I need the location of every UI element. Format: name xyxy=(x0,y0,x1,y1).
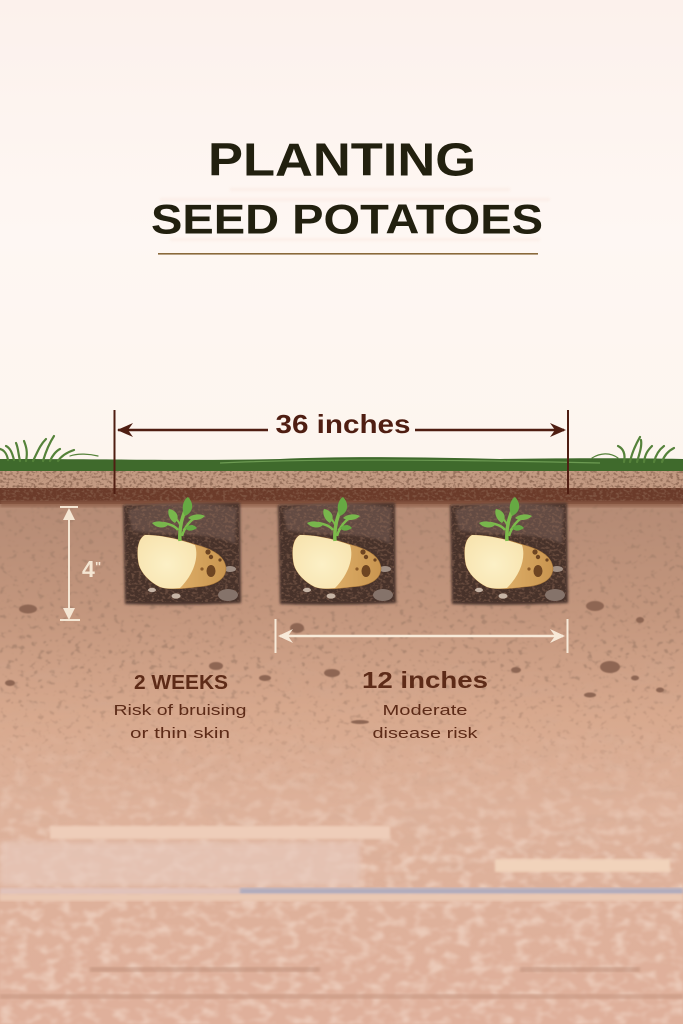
title underline xyxy=(158,253,538,255)
soil background xyxy=(0,495,683,1024)
label: 12 inches: disease risk xyxy=(372,725,478,742)
dimension: 4 inch depth: " xyxy=(95,559,101,574)
faint streaks behind title xyxy=(160,188,550,241)
label: 12 inches xyxy=(362,667,488,742)
dimension: 4 inch depth: 4 xyxy=(82,556,95,582)
title: SEED POTATOES xyxy=(151,196,543,242)
label: 2 weeks xyxy=(114,672,246,742)
planted potato 2 xyxy=(278,497,396,605)
scattered stones xyxy=(5,601,664,724)
label: 12 inches: 12 inches xyxy=(362,667,488,693)
planted potato 3 xyxy=(450,497,568,605)
soil bands and haze near bottom xyxy=(0,826,683,999)
dimension: 4 inch depth xyxy=(60,507,101,620)
label: 2 weeks: 2 WEEKS xyxy=(134,672,228,694)
dimension: 36 inches: 36 inches xyxy=(276,409,410,439)
planted potato 1 xyxy=(123,497,241,605)
label: 12 inches: Moderate xyxy=(382,702,468,719)
title: PLANTING xyxy=(208,134,476,186)
title xyxy=(151,134,543,242)
dimension: 36 inches xyxy=(114,409,568,494)
sky background xyxy=(0,0,683,470)
grass tuft left xyxy=(0,436,98,461)
label: 2 weeks: or thin skin xyxy=(130,725,230,742)
grass strip xyxy=(0,457,683,471)
label: 2 weeks: Risk of bruising xyxy=(114,702,246,719)
dimension: 12 inches spacing xyxy=(276,619,568,653)
grass tuft right xyxy=(592,437,674,462)
topsoil layer xyxy=(0,470,683,507)
